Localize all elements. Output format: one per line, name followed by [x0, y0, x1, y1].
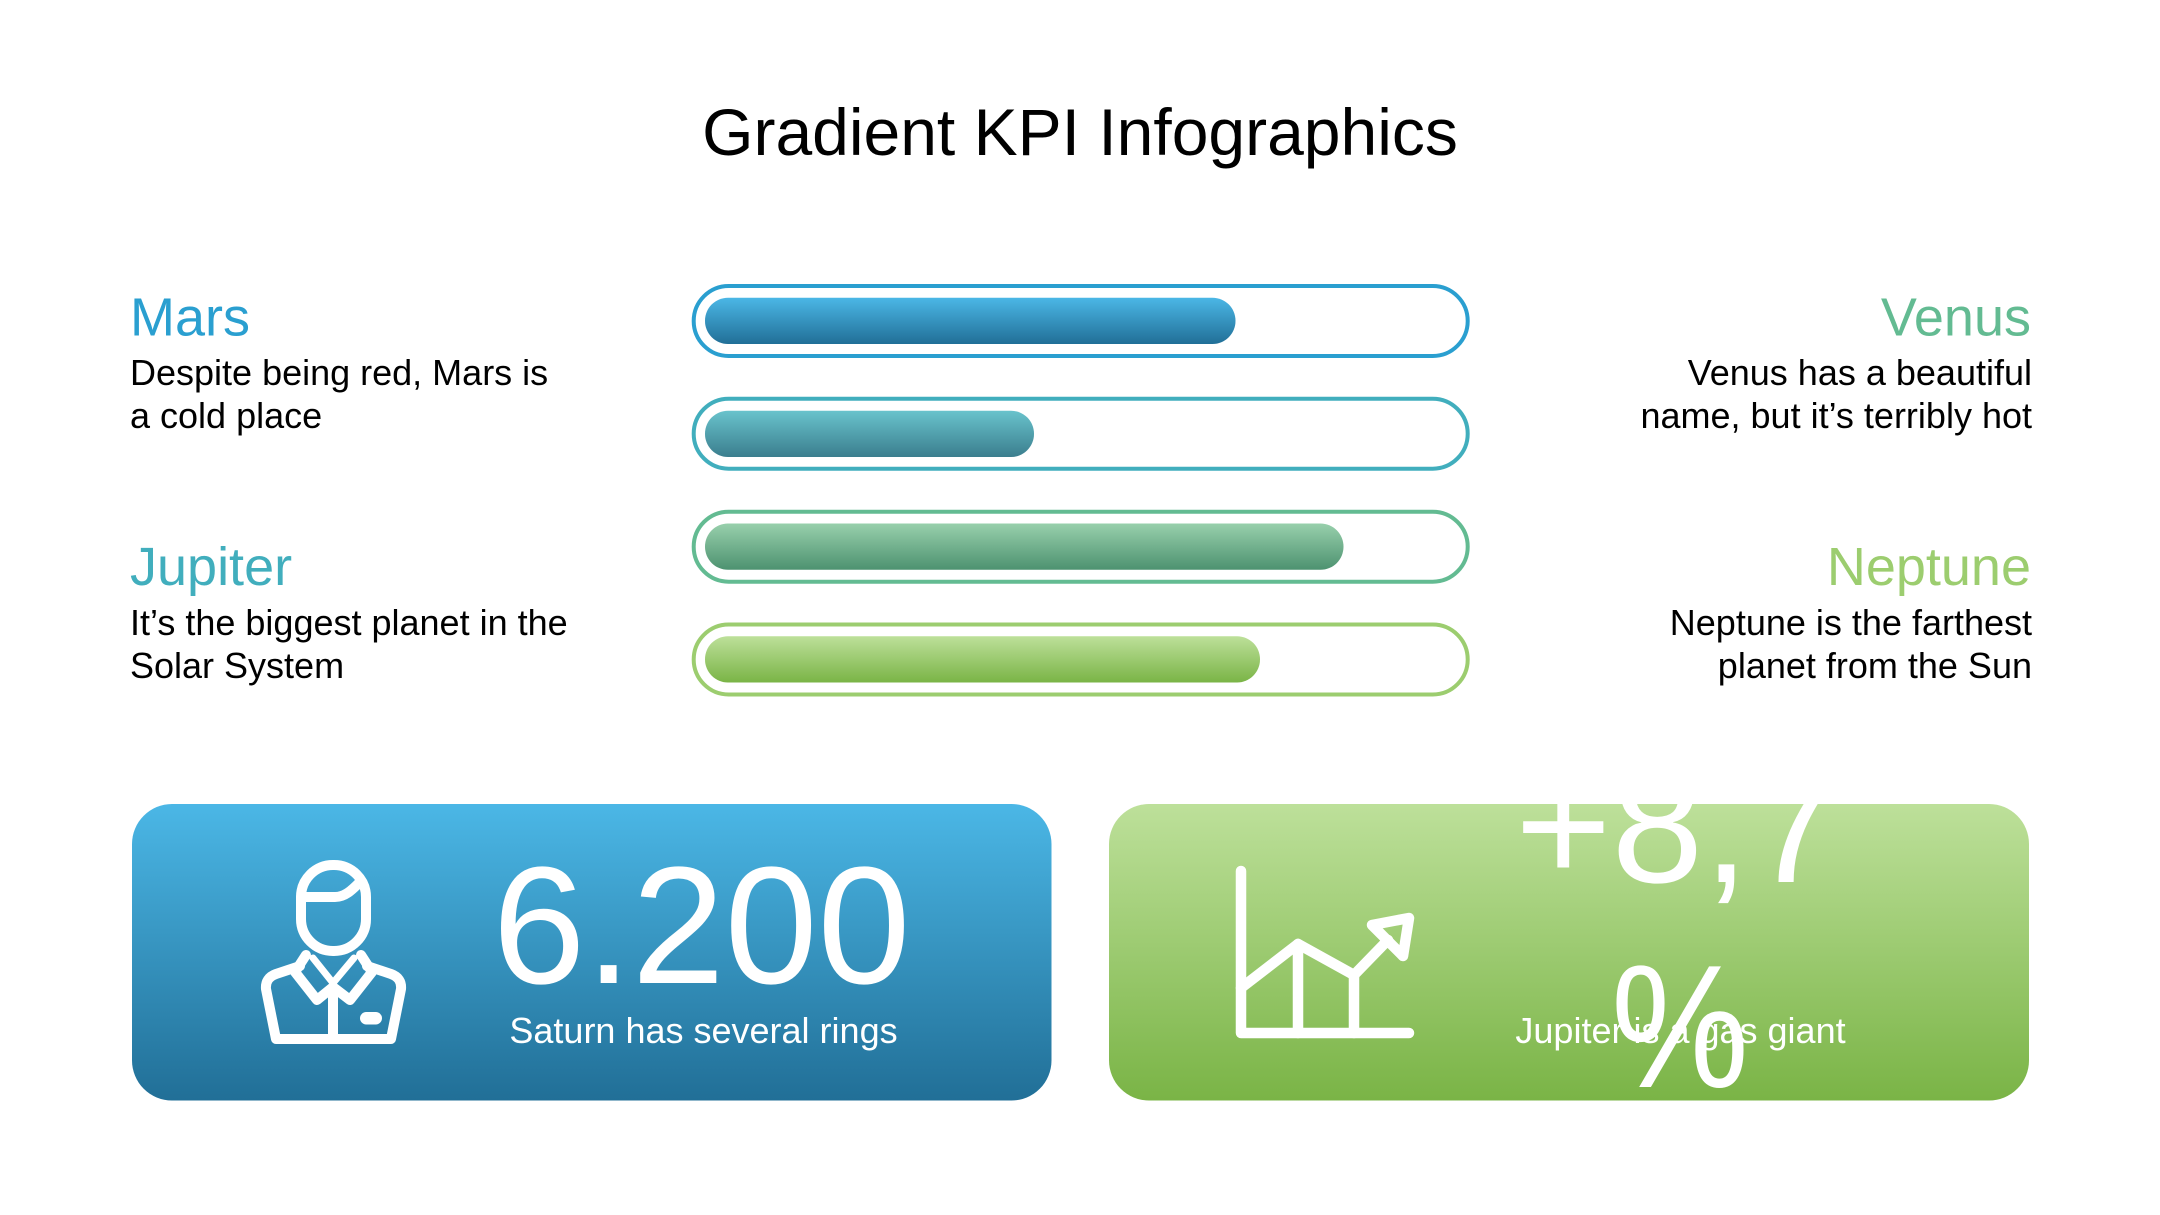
KPI value: +8,7 % — [1515, 733, 1841, 1125]
heading: Venus: Venus — [1881, 288, 2031, 348]
KPI value: +8,7 %: % — [1611, 929, 1749, 1125]
text: Neptune description: planet from the Sun — [1718, 645, 2032, 686]
text: Venus description: name, but it’s terribly hot — [1640, 395, 2032, 436]
heading: Neptune: Neptune — [1827, 537, 2031, 597]
KPI value: +8,7 %: +8,7 — [1515, 733, 1841, 917]
panel: Jupiter KPI card — [1109, 733, 2029, 1125]
heading: Jupiter: Jupiter — [130, 537, 292, 597]
progress bar: Venus — [694, 512, 1468, 582]
progress bar: Neptune — [694, 624, 1468, 694]
panel: Saturn KPI card — [132, 804, 1052, 1100]
text: Jupiter description: Solar System — [130, 645, 344, 686]
icon: growth chart with arrow — [1241, 871, 1409, 1033]
KPI caption: Jupiter: Jupiter is a gas giant — [1515, 1010, 1846, 1051]
panel: Jupiter text — [130, 537, 568, 686]
title: Gradient KPI Infographics — [702, 95, 1458, 169]
panel: Neptune text — [1670, 537, 2032, 686]
icon: person in suit — [266, 865, 401, 1039]
progress bar: Jupiter — [694, 399, 1468, 469]
KPI caption: Saturn: Saturn has several rings — [509, 1010, 898, 1051]
text: Venus description: Venus has a beautiful — [1688, 352, 2032, 393]
progress bar: Mars — [694, 286, 1468, 356]
text: Jupiter description: It’s the biggest planet in the — [130, 602, 568, 643]
text: Mars description: a cold place — [130, 395, 322, 436]
KPI value: 6.200: 6.200 — [493, 833, 910, 1019]
panel: Venus text — [1640, 288, 2032, 436]
text: Mars description: Despite being red, Mars is — [130, 352, 548, 393]
heading: Mars: Mars — [130, 288, 250, 348]
text: Neptune description: Neptune is the farthest — [1670, 602, 2032, 643]
panel: Mars text — [130, 288, 548, 436]
